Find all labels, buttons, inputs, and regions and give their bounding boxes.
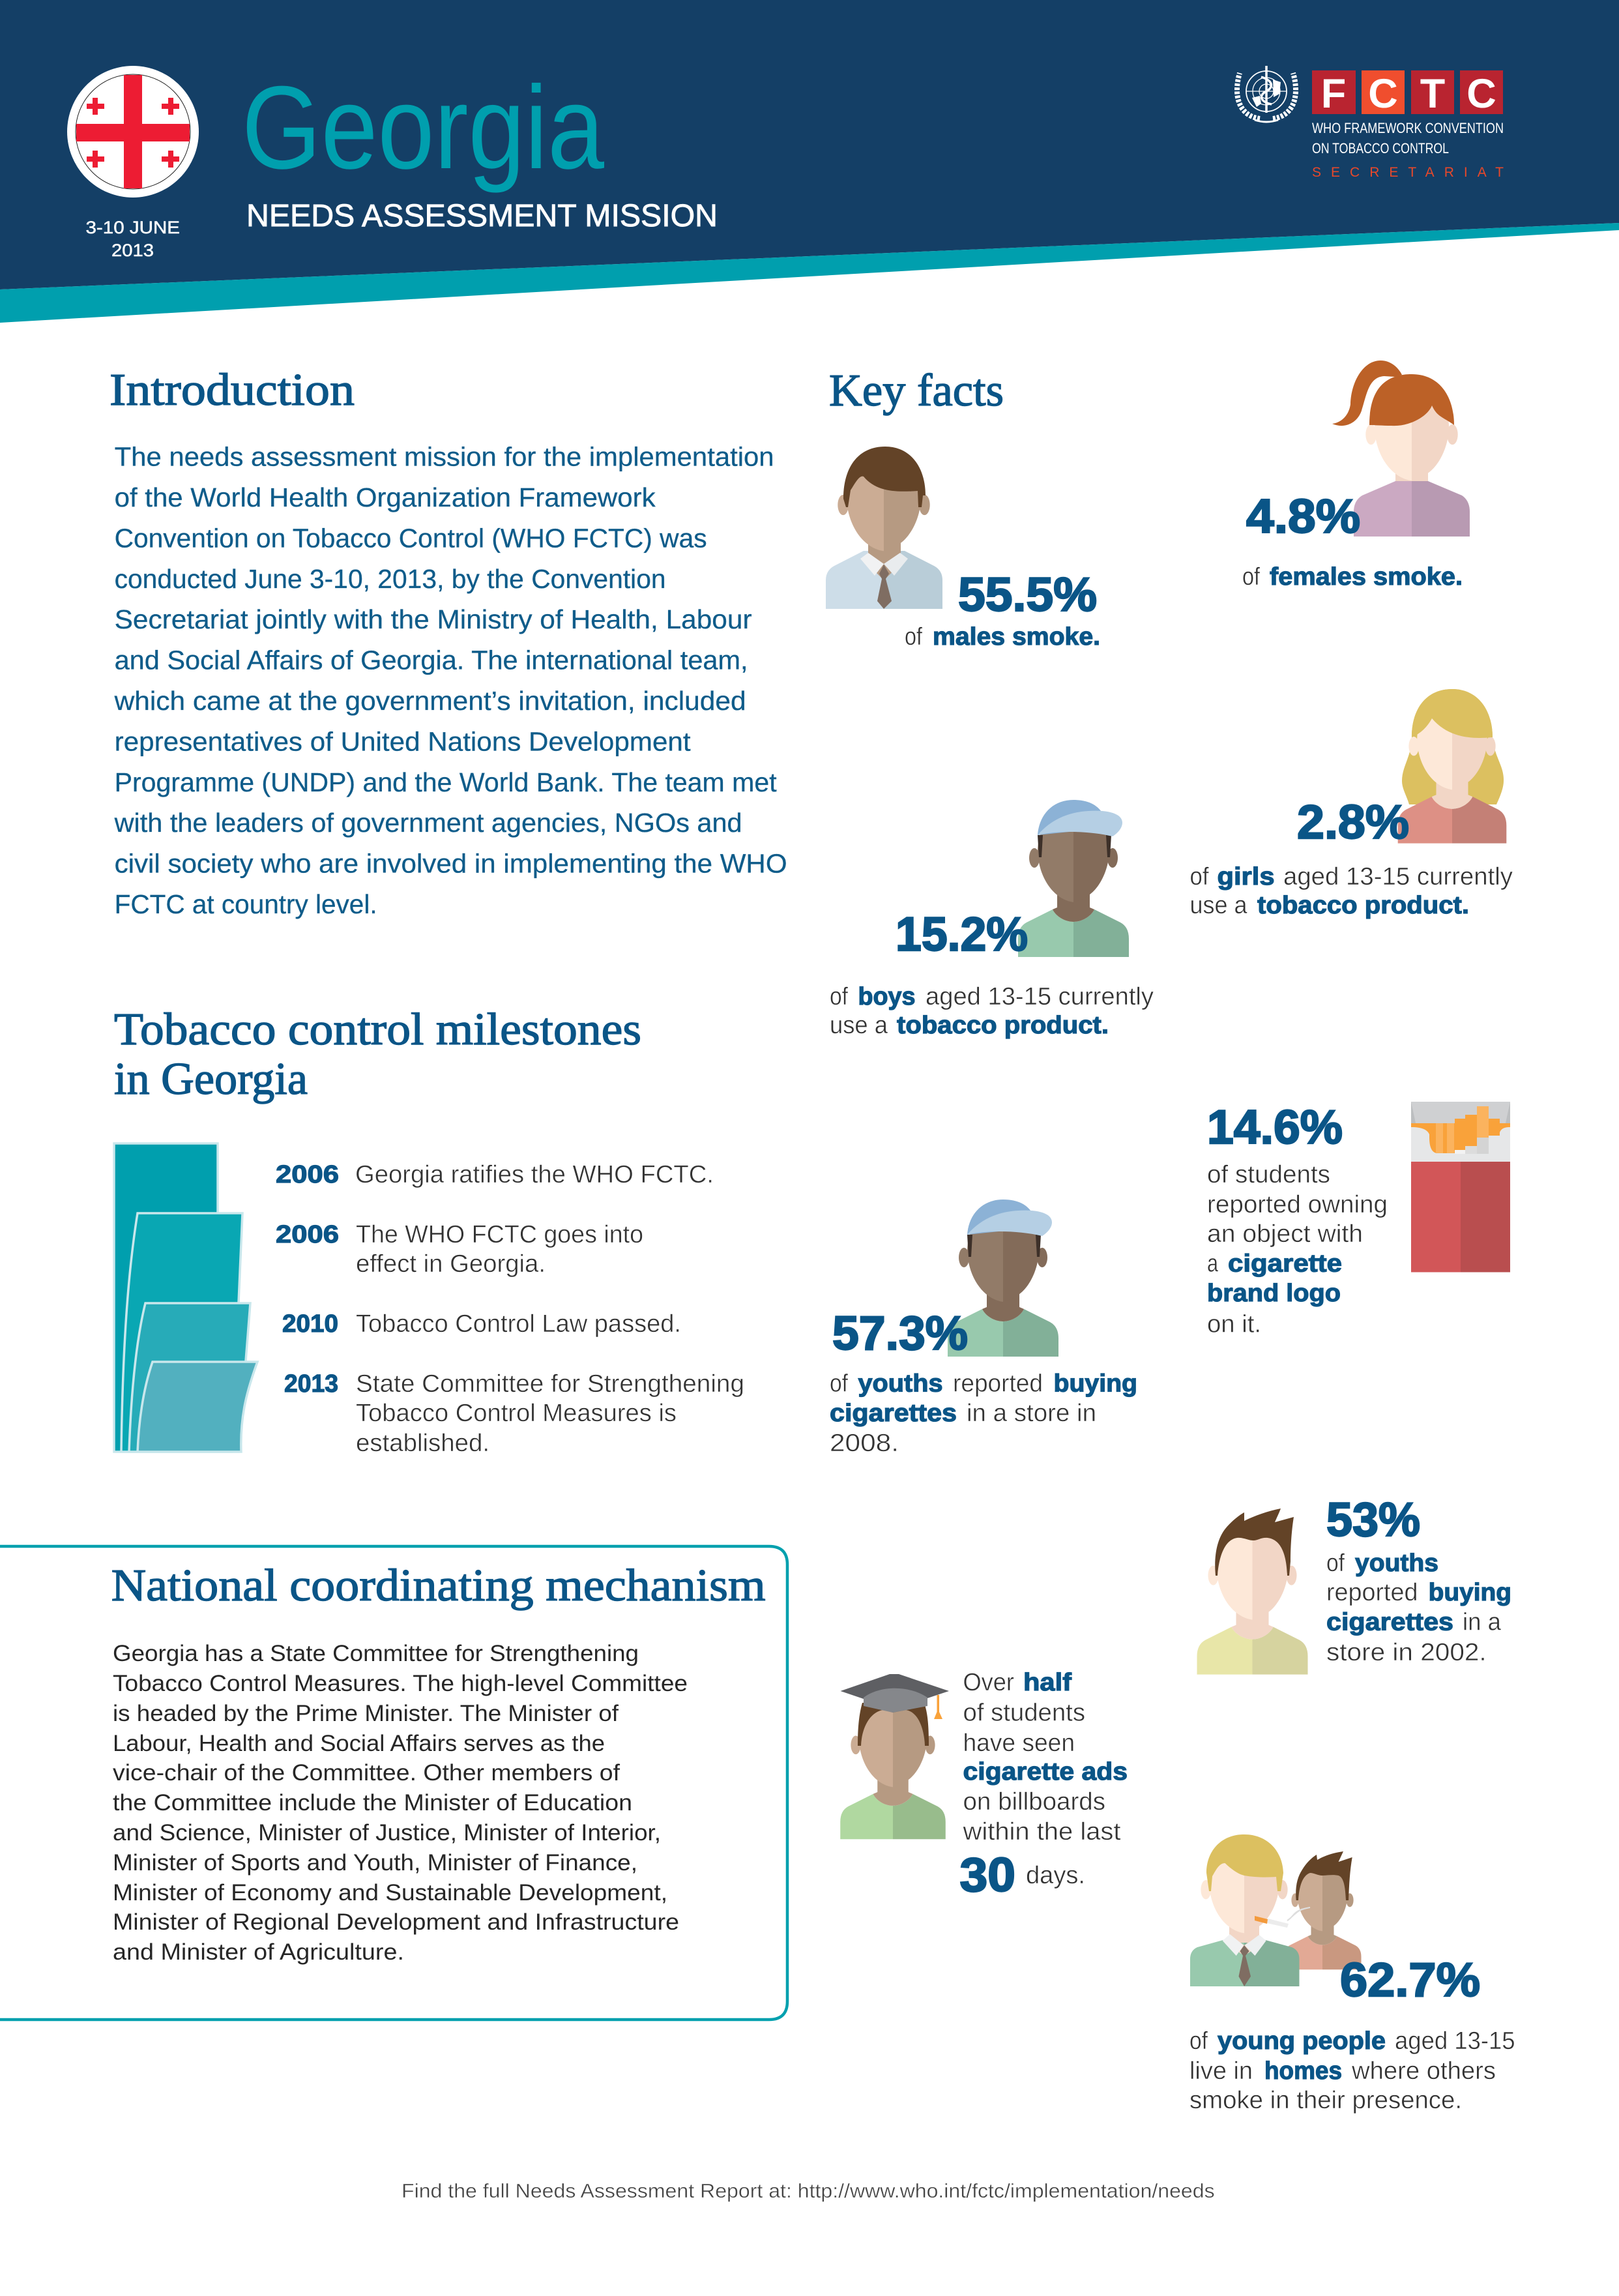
stat: youths buying cigarettes 2008: in a store in	[967, 1400, 1096, 1427]
stat: males smoke	[905, 568, 1100, 651]
stat: young people exposed at home: young people	[1218, 2027, 1386, 2055]
stat: girls tobacco use: of	[1190, 863, 1209, 890]
FCTC logo: F	[1321, 71, 1346, 117]
icon: Georgia flag	[67, 66, 199, 198]
text block: introduction: conducted June 3-10, 2013, by the Convention	[115, 564, 666, 594]
text block: national coordinating mechanism: Labour, Health and Social Affairs serves as the	[113, 1731, 605, 1756]
stat: youths buying cigarettes 2008	[830, 1307, 1137, 1457]
stat: girls tobacco use	[1190, 796, 1513, 919]
stat: youths buying cigarettes 2002: 53%	[1326, 1494, 1420, 1546]
milestone 2006 entry into force: effect in Georgia.	[356, 1250, 546, 1278]
stat: youths buying cigarettes 2002: store in 2002.	[1326, 1639, 1487, 1666]
text block: introduction: and Social Affairs of Georgia. The international team,	[115, 645, 748, 675]
stat: girls tobacco use: girls	[1218, 863, 1275, 890]
icon: youth with spiky hair	[1197, 1509, 1307, 1675]
stat: males smoke: 55.5%	[958, 568, 1097, 621]
milestone 2013	[284, 1370, 744, 1457]
stat: youths buying cigarettes 2008: 57.3%	[832, 1307, 968, 1360]
text block: national coordinating mechanism: Tobacco Control Measures. The high-level Committee	[113, 1671, 688, 1696]
FCTC logo	[1312, 70, 1504, 180]
stat: students seeing cigarette ads	[959, 1669, 1128, 1902]
stat: students seeing cigarette ads: of students	[963, 1699, 1085, 1726]
milestone 2006 entry into force: 2006	[276, 1221, 339, 1248]
stat: students branded object: cigarette	[1228, 1250, 1342, 1278]
stat: young people exposed at home: where others	[1351, 2057, 1496, 2085]
stat: youths buying cigarettes 2002: of	[1326, 1550, 1345, 1577]
stat: youths buying cigarettes 2002: buying	[1429, 1579, 1511, 1606]
icon: smoker and bystander	[1190, 1834, 1361, 1986]
icon: woman with ponytail	[1332, 361, 1470, 537]
milestone 2006 ratification: 2006	[276, 1161, 339, 1188]
stat: students seeing cigarette ads: on billboards	[963, 1788, 1105, 1816]
stat: young people exposed at home: of	[1189, 2027, 1208, 2055]
text block: national coordinating mechanism: and Science, Minister of Justice, Minister of Interior,	[113, 1820, 661, 1846]
heading: milestones: in Georgia	[114, 1054, 308, 1104]
stat: females smoke: 4.8%	[1246, 490, 1360, 543]
text block: introduction: which came at the government’s invitation, included	[114, 686, 746, 716]
text block: introduction	[114, 442, 787, 919]
text block: national coordinating mechanism: and Minister of Agriculture.	[113, 1939, 404, 1965]
milestone 2013: Tobacco Control Measures is	[356, 1400, 677, 1427]
icon: WHO emblem	[1237, 66, 1296, 122]
stat: youths buying cigarettes 2008: buying	[1053, 1370, 1137, 1398]
heading: milestones	[114, 1005, 641, 1104]
stat: youths buying cigarettes 2002: cigarettes	[1326, 1609, 1453, 1636]
heading: Introduction: Introduction	[109, 365, 355, 415]
text block: introduction: civil society who are involved in implementing the WHO	[115, 849, 787, 879]
milestone 2013: 2013	[284, 1370, 338, 1398]
FCTC logo: WHO FRAMEWORK CONVENTION	[1312, 120, 1504, 136]
heading: national coordinating mechanism: National coordinating mechanism	[111, 1561, 766, 1611]
stat: students branded object: on it.	[1207, 1310, 1261, 1338]
text block: national coordinating mechanism: vice-chair of the Committee. Other members of	[113, 1760, 620, 1786]
heading: milestones: Tobacco control milestones	[114, 1005, 641, 1055]
text block: national coordinating mechanism: Minister of Regional Development and Infrastructure	[113, 1909, 679, 1935]
stat: young people exposed at home: smoke in their presence.	[1189, 2087, 1462, 2114]
FCTC logo: T	[1420, 71, 1445, 117]
stat: students seeing cigarette ads: within the last	[962, 1818, 1121, 1846]
text block: introduction: Programme (UNDP) and the World Bank. The team met	[115, 767, 777, 797]
stat: students branded object: of students	[1207, 1161, 1330, 1188]
stat: boys tobacco use: aged 13-15 currently	[926, 983, 1154, 1010]
chart: milestone tabs	[114, 1143, 257, 1452]
stat: youths buying cigarettes 2002: in a	[1463, 1609, 1502, 1636]
milestone 2006 entry into force	[276, 1221, 643, 1278]
icon: boy with cap	[1018, 800, 1129, 957]
stat: students branded object: a	[1207, 1250, 1219, 1278]
text block: introduction: representatives of United Nations Development	[115, 726, 691, 756]
stat: students branded object	[1207, 1101, 1388, 1338]
milestone 2006 ratification: Georgia ratifies the WHO FCTC.	[355, 1161, 714, 1188]
milestone 2010: Tobacco Control Law passed.	[356, 1310, 681, 1338]
mission dates: 3-10 JUNE	[86, 218, 180, 237]
stat: youths buying cigarettes 2008: of	[830, 1370, 848, 1398]
stat: young people exposed at home	[1189, 1954, 1515, 2114]
stat: students seeing cigarette ads: Over	[963, 1669, 1014, 1696]
stat: students branded object: 14.6%	[1207, 1101, 1343, 1154]
icon: youth with cap	[948, 1200, 1058, 1357]
text block: introduction: with the leaders of government agencies, NGOs and	[114, 808, 742, 838]
stat: youths buying cigarettes 2008: reported	[953, 1370, 1043, 1398]
subtitle: NEEDS ASSESSMENT MISSION	[246, 199, 718, 233]
stat: boys tobacco use	[830, 908, 1154, 1039]
stat: youths buying cigarettes 2002: youths	[1355, 1550, 1438, 1577]
stat: students seeing cigarette ads: 30	[959, 1849, 1015, 1902]
stat: youths buying cigarettes 2008: youths	[858, 1370, 942, 1398]
text block: introduction: Secretariat jointly with the Ministry of Health, Labour	[115, 604, 752, 634]
stat: young people exposed at home: aged 13-15	[1395, 2027, 1515, 2055]
mission dates	[86, 218, 180, 260]
stat: females smoke	[1242, 490, 1463, 591]
stat: boys tobacco use: 15.2%	[896, 908, 1028, 961]
title: Georgia	[242, 62, 604, 194]
text block: national coordinating mechanism: Minister of Economy and Sustainable Development,	[113, 1880, 667, 1906]
stat: students seeing cigarette ads: half	[1023, 1669, 1072, 1696]
text block: national coordinating mechanism	[113, 1641, 688, 1965]
stat: males smoke: males smoke.	[933, 623, 1100, 651]
icon: girl with blond hair	[1398, 689, 1506, 844]
milestone 2013: established.	[356, 1430, 489, 1457]
text block: introduction: of the World Health Organization Framework	[115, 482, 656, 512]
icon: graduate student	[840, 1674, 949, 1839]
stat: young people exposed at home: live in	[1189, 2057, 1253, 2085]
stat: students branded object: brand logo	[1207, 1280, 1341, 1307]
stat: students branded object: reported owning	[1207, 1191, 1388, 1218]
FCTC logo: C	[1368, 71, 1398, 117]
text block: national coordinating mechanism: is headed by the Prime Minister. The Minister of	[113, 1701, 619, 1726]
icon: cigarette pack	[1411, 1102, 1510, 1273]
FCTC logo: SECRETARIAT	[1312, 165, 1504, 180]
stat: young people exposed at home: 62.7%	[1340, 1954, 1480, 2007]
stat: students branded object: an object with	[1207, 1220, 1363, 1248]
mission dates: 2013	[111, 241, 154, 260]
stat: girls tobacco use: aged 13-15 currently	[1283, 863, 1513, 890]
stat: boys tobacco use: tobacco product.	[897, 1012, 1109, 1039]
text block: introduction: FCTC at country level.	[115, 889, 377, 919]
text block: national coordinating mechanism: the Committee include the Minister of Education	[113, 1790, 632, 1816]
milestone 2010: 2010	[282, 1310, 338, 1338]
stat: students seeing cigarette ads: days.	[1026, 1862, 1085, 1889]
stat: youths buying cigarettes 2008: 2008.	[830, 1430, 899, 1457]
heading: key facts: Key facts	[829, 366, 1004, 416]
text block: introduction: The needs assessment mission for the implementation	[115, 442, 774, 472]
panel: national coordinating mechanism	[0, 1546, 787, 2020]
FCTC logo: C	[1466, 71, 1496, 117]
milestone 2006 entry into force: The WHO FCTC goes into	[356, 1221, 643, 1248]
stat: young people exposed at home: homes	[1264, 2057, 1342, 2085]
stat: boys tobacco use: boys	[858, 983, 915, 1010]
stat: girls tobacco use: 2.8%	[1297, 796, 1409, 849]
text block: national coordinating mechanism: Minister of Sports and Youth, Minister of Finance,	[113, 1850, 637, 1876]
text block: introduction: Convention on Tobacco Control (WHO FCTC) was	[115, 523, 707, 553]
stat: youths buying cigarettes 2002: reported	[1326, 1579, 1418, 1606]
stat: students seeing cigarette ads: have seen	[963, 1729, 1075, 1757]
stat: youths buying cigarettes 2008: cigarettes	[830, 1400, 957, 1427]
stat: girls tobacco use: use a	[1190, 892, 1247, 919]
stat: girls tobacco use: tobacco product.	[1257, 892, 1469, 919]
FCTC logo: ON TOBACCO CONTROL	[1312, 140, 1449, 156]
icon: man with tie	[826, 447, 942, 609]
stat: females smoke: females smoke.	[1270, 563, 1463, 591]
stat: boys tobacco use: use a	[830, 1012, 888, 1039]
stat: youths buying cigarettes 2002	[1326, 1494, 1511, 1666]
stat: females smoke: of	[1242, 563, 1260, 591]
stat: students seeing cigarette ads: cigarette ads	[963, 1758, 1128, 1786]
stat: boys tobacco use: of	[830, 983, 848, 1010]
text block: national coordinating mechanism: Georgia has a State Committee for Strengthening	[113, 1641, 639, 1666]
header banner	[0, 0, 1619, 323]
stat: males smoke: of	[905, 623, 922, 651]
milestone 2013: State Committee for Strengthening	[356, 1370, 744, 1398]
footer link: Find the full Needs Assessment Report at: http://www.who.int/fctc/implementation/needs	[401, 2179, 1215, 2202]
